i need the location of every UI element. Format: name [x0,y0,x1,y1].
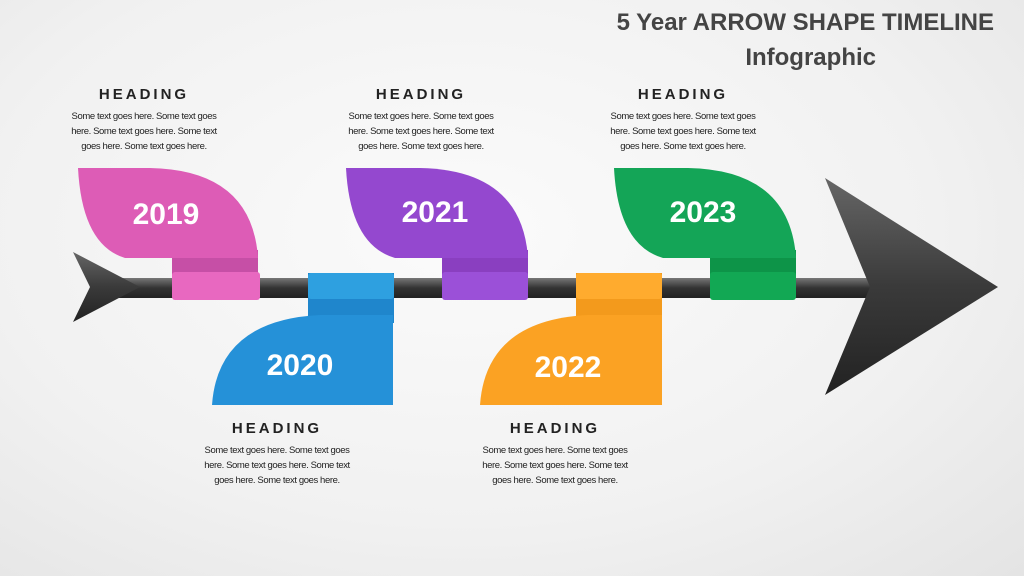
text block 2020: HEADING [232,420,322,437]
marker 2020 [212,273,394,405]
text block 2022: here. Some text goes here. Some text [482,460,628,471]
marker 2021 [346,168,528,300]
text block 2021: Some text goes here. Some text goes [349,111,493,122]
arrow head [825,178,998,395]
text block 2019: Some text goes here. Some text goes [72,111,216,122]
title: Infographic [745,44,876,71]
marker 2022: 2022 [535,351,601,384]
marker 2023: 2023 [670,196,736,229]
marker 2022 [480,273,662,405]
text block 2023: HEADING [638,86,728,103]
marker 2021: 2021 [402,196,468,229]
title: 5 Year ARROW SHAPE TIMELINE [617,9,994,36]
text block 2021: here. Some text goes here. Some text [348,126,494,137]
text block 2022: goes here. Some text goes here. [492,475,618,486]
arrow shaft [100,278,880,298]
text block 2023: here. Some text goes here. Some text [610,126,756,137]
text block 2023: Some text goes here. Some text goes [611,111,755,122]
text block 2019: goes here. Some text goes here. [81,141,207,152]
text block 2021: HEADING [376,86,466,103]
text block 2019: HEADING [99,86,189,103]
text block 2021: goes here. Some text goes here. [358,141,484,152]
text block 2022: Some text goes here. Some text goes [483,445,627,456]
text block 2019: here. Some text goes here. Some text [71,126,217,137]
text block 2020: Some text goes here. Some text goes [205,445,349,456]
text block 2020 [204,420,350,486]
text block 2021 [348,86,494,152]
text block 2020: goes here. Some text goes here. [214,475,340,486]
text block 2023: goes here. Some text goes here. [620,141,746,152]
title [617,9,994,71]
text block 2022 [482,420,628,486]
arrow tail [73,252,140,322]
text block 2020: here. Some text goes here. Some text [204,460,350,471]
marker 2020: 2020 [267,349,333,382]
marker 2019: 2019 [133,198,199,231]
marker 2019 [78,168,260,300]
text block 2019 [71,86,218,152]
marker 2023 [614,168,796,300]
text block 2023 [610,86,756,152]
text block 2022: HEADING [510,420,600,437]
